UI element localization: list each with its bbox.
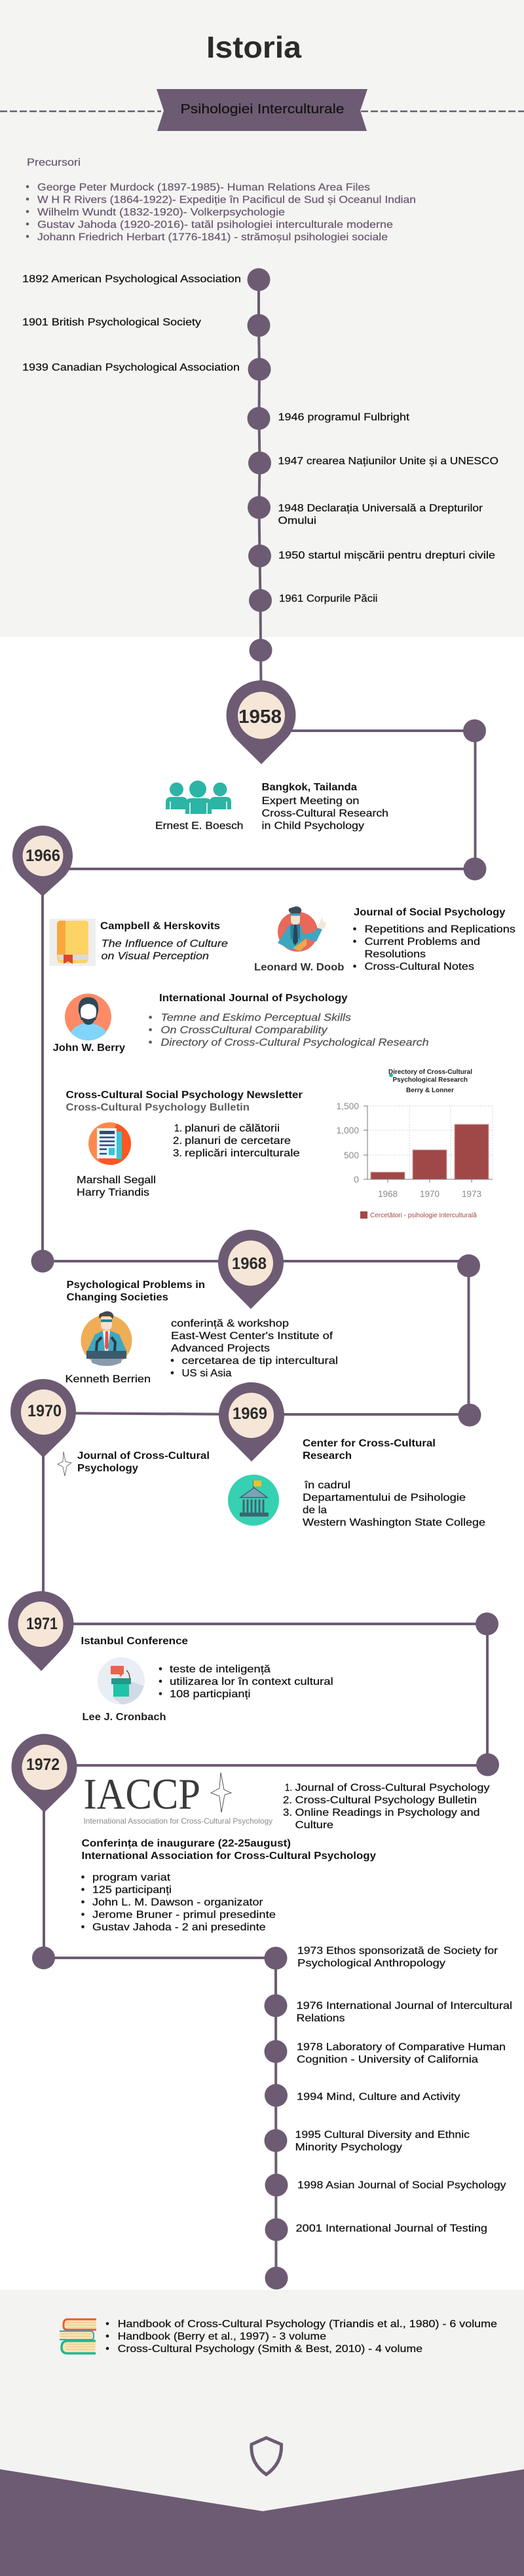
timeline: later events: Psychological Anthropology — [297, 1958, 445, 1969]
text: Istanbul topics: teste de inteligență — [170, 1664, 271, 1675]
pin: 1972 — [12, 1734, 77, 1812]
text: Campbell and Herskovits: on Visual Perception — [101, 951, 209, 962]
icon: book — [50, 919, 96, 966]
text: conference and workshop — [171, 1318, 338, 1379]
timeline: later events: 1998 Asian Journal of Social Psychology — [297, 2180, 506, 2191]
timeline: early events: 1939 Canadian Psychological Association — [22, 362, 240, 373]
text: inaugural conference: International Association for Cross-Cultural Psychology — [81, 1850, 376, 1862]
bar chart: Cercetători - psihologie interculturală — [370, 1212, 477, 1219]
pin: 1958: 1958 — [238, 707, 282, 727]
text: Istanbul topics: 108 particpianți — [170, 1689, 251, 1700]
icon: Leonard Doob — [278, 906, 326, 952]
text: International Journal of Psychology: Directory of Cross-Cultural Psychological Research — [160, 1037, 429, 1048]
text: Journal of Social Psychology: Journal of Social Psychology — [354, 907, 506, 918]
text: newsletter contents: 1. — [174, 1123, 182, 1134]
text: newsletter and bulletin: Cross-Cultural Psychology Bulletin — [66, 1102, 250, 1113]
text: Psychological Problems — [67, 1279, 205, 1303]
icon: newsletter — [88, 1122, 131, 1165]
timeline: early events: 1947 crearea Națiunilor Unite și a UNESCO — [278, 456, 498, 467]
text: Istanbul topics — [159, 1664, 333, 1700]
text: newsletter contents — [173, 1123, 300, 1159]
text: inaugural conference: Conferința de inaugurare (22-25august) — [81, 1838, 291, 1849]
icon: stack of books — [60, 2319, 96, 2353]
panel: precursors: Wilhelm Wundt (1832-1920)- Volkerpsychologie — [37, 207, 285, 218]
timeline: early events — [22, 268, 498, 684]
text: department: Western Washington State College — [303, 1517, 485, 1528]
text: Bangkok meeting: Expert Meeting on — [262, 796, 359, 807]
timeline: later events: Relations — [296, 2013, 345, 2024]
text: Psychological Problems: Changing Societies — [67, 1292, 168, 1303]
text: Journal of Cross-Cultural Psychology: Journal of Cross-Cultural — [77, 1450, 210, 1462]
text: conference and workshop: East-West Center's Institute of — [171, 1331, 333, 1342]
pin: 1958 — [227, 680, 296, 764]
text: inaugural conference — [81, 1838, 376, 1862]
icon: group of people — [166, 781, 231, 814]
panel: precursors: W H R Rivers (1864-1922)- Expediție în Pacificul de Sud și Oceanul Indian — [37, 194, 416, 206]
timeline: later events: 1973 Ethos sponsorizată de Society for — [297, 1945, 498, 1957]
panel: precursors: George Peter Murdock (1897-1985)- Human Relations Area Files — [37, 182, 370, 193]
text: department: în cadrul — [304, 1480, 350, 1491]
bar chart: 500 — [344, 1150, 359, 1160]
text: newsletter contents: replicări interculturale — [185, 1148, 300, 1159]
pin: 1969 — [219, 1382, 284, 1462]
text: conference details: program variat — [92, 1872, 171, 1883]
text: conference details: Gustav Jahoda - 2 ani presedinte — [92, 1922, 266, 1933]
timeline: early events: 1946 programul Fulbright — [278, 412, 410, 423]
text: Campbell and Herskovits: The Influence of Culture — [101, 938, 228, 949]
pin: 1968 — [218, 1230, 284, 1309]
timeline: early events: 1948 Declarația Universală a Drepturilor — [278, 503, 483, 514]
pin: 1971 — [9, 1591, 73, 1671]
text: Journal of Social Psychology: Repetitions and Replications — [364, 924, 515, 935]
text: Segall and Triandis — [77, 1175, 156, 1198]
text: handbooks: Handbook of Cross-Cultural Psychology (Triandis et al., 1980) - 6 volume — [118, 2319, 497, 2330]
text: International Journal of Psychology: Temne and Eskimo Perceptual Skills — [160, 1012, 351, 1023]
text: handbooks: Handbook (Berry et al., 1997) - 3 volume — [118, 2331, 326, 2342]
bar chart: 1,500 — [337, 1101, 359, 1111]
timeline: later events: 1976 International Journal of Intercultural — [296, 2000, 512, 2012]
text: department: Departamentului de Psihologie — [303, 1492, 466, 1503]
text: Boesch: Ernest E. Boesch — [155, 820, 244, 832]
text: International Journal of Psychology: On CrossCultural Comparability — [160, 1025, 328, 1036]
text: Center for Cross-Cultural Research: Center for Cross-Cultural — [303, 1438, 436, 1449]
text: Segall and Triandis: Marshall Segall — [77, 1175, 156, 1186]
subtitle ribbon: Psihologiei Interculturale — [181, 102, 345, 117]
connector lines: main path — [31, 719, 499, 2289]
bar chart: 1973 — [462, 1188, 481, 1199]
text: International Journal of Psychology: International Journal of Psychology — [159, 993, 348, 1004]
text: Bangkok meeting — [262, 782, 388, 832]
text: IACCP publications: Journal of Cross-Cultural Psychology — [295, 1782, 490, 1794]
panel: precursors — [26, 157, 416, 243]
text: handbooks: Cross-Cultural Psychology (Smith & Best, 2010) - 4 volume — [118, 2344, 422, 2355]
pin: 1970 — [10, 1379, 76, 1458]
timeline: later events: 1994 Mind, Culture and Activity — [297, 2091, 460, 2103]
timeline: early events: 1901 British Psychological Society — [22, 317, 201, 328]
logo: IACCP: International Association for Cross-Cultural Psychology — [84, 1816, 272, 1826]
panel: precursors: Gustav Jahoda (1920-2016)- tatăl psihologiei interculturale moderne — [37, 219, 393, 230]
text: IACCP publications — [283, 1782, 490, 1831]
text: Center for Cross-Cultural Research: Research — [303, 1450, 352, 1462]
bar chart: Berry & Lonner — [406, 1086, 454, 1094]
text: newsletter contents: planuri de călătorii — [185, 1123, 280, 1134]
logo: IACCP: IACCP — [84, 1770, 200, 1818]
logo: IACCP — [79, 1768, 275, 1828]
bar chart: Directory of Cross-Cultural — [388, 1068, 472, 1076]
text: IACCP publications: 1. — [285, 1782, 292, 1794]
bar chart: 1970 — [420, 1188, 440, 1199]
bar chart: 0 — [354, 1174, 359, 1185]
text: Kenneth Berrien: Kenneth Berrien — [66, 1374, 151, 1385]
timeline: later events: Cognition - University of California — [297, 2054, 478, 2065]
timeline: later events: Minority Psychology — [295, 2142, 402, 2153]
pin: 1969: 1969 — [233, 1405, 267, 1423]
text: Journal of Cross-Cultural Psychology — [77, 1450, 210, 1474]
text: conference details: 125 participanți — [92, 1885, 172, 1896]
bar chart: 1968 — [378, 1188, 398, 1199]
text: Bangkok meeting: Cross-Cultural Research — [262, 808, 388, 819]
text: newsletter and bulletin — [66, 1090, 303, 1113]
pin: 1968: 1968 — [232, 1255, 267, 1273]
subtitle ribbon — [157, 89, 367, 131]
text: IACCP publications: 3. — [283, 1807, 292, 1818]
text: Segall and Triandis: Harry Triandis — [77, 1187, 149, 1198]
text: newsletter contents: 2. — [173, 1135, 182, 1147]
timeline: later events: 2001 International Journal of Testing — [296, 2223, 487, 2234]
text: International Journal of Psychology — [149, 993, 429, 1048]
icon: institution building — [228, 1475, 279, 1526]
pin: 1972: 1972 — [26, 1756, 60, 1774]
text: Journal of Social Psychology: Resolutions — [364, 949, 426, 960]
pin: 1966 — [12, 826, 73, 896]
footer chevron — [0, 2469, 524, 2576]
text: conference and workshop: US si Asia — [182, 1368, 232, 1379]
icon: Cronbach podium — [98, 1657, 145, 1704]
timeline: early events: 1950 startul mișcării pentru drepturi civile — [278, 550, 495, 561]
icon: John Berry — [65, 994, 111, 1040]
text: IACCP publications: Culture — [295, 1820, 333, 1831]
title: Istoria — [206, 30, 301, 64]
bar chart: Psychological Research — [393, 1076, 468, 1084]
text: department: de la — [303, 1505, 327, 1516]
timeline: later events: 1995 Cultural Diversity and Ethnic — [295, 2129, 470, 2141]
pin: 1970: 1970 — [28, 1402, 62, 1420]
bar chart: 1,000 — [337, 1125, 359, 1135]
text: Psychological Problems: Psychological Problems in — [67, 1279, 205, 1291]
timeline: later events: 1978 Laboratory of Comparative Human — [297, 2042, 506, 2053]
text: John Berry: John W. Berry — [53, 1042, 125, 1054]
icon: shield — [252, 2438, 282, 2475]
text: Istanbul topics: utilizarea lor în context cultural — [170, 1676, 333, 1687]
text: IACCP publications: Online Readings in Psychology and — [295, 1807, 480, 1818]
text: Leonard Doob: Leonard W. Doob — [254, 962, 345, 973]
text: Campbell and Herskovits: Campbell & Herskovits — [100, 921, 220, 932]
text: conference details — [81, 1872, 276, 1933]
text: handbooks — [106, 2319, 497, 2355]
timeline: early events: 1961 Corpurile Păcii — [279, 593, 377, 604]
timeline: later events — [295, 1945, 512, 2234]
text: conference and workshop: conferință & workshop — [171, 1318, 289, 1329]
text: Bangkok meeting: Bangkok, Tailanda — [262, 782, 357, 793]
text: Bangkok meeting: in Child Psychology — [262, 820, 364, 832]
text: newsletter and bulletin: Cross-Cultural Social Psychology Newsletter — [66, 1090, 303, 1101]
bar chart — [337, 1068, 493, 1219]
text: Journal of Social Psychology: Cross-Cultural Notes — [364, 961, 474, 972]
timeline: early events: Omului — [278, 515, 316, 526]
text: Journal of Social Psychology — [353, 907, 515, 972]
text: department — [303, 1480, 485, 1528]
text: Lee Cronbach: Lee J. Cronbach — [83, 1712, 166, 1723]
text: newsletter contents: 3. — [173, 1148, 182, 1159]
text: conference and workshop: cercetarea de tip intercultural — [182, 1355, 338, 1367]
pin: 1971: 1971 — [26, 1615, 58, 1633]
pin: 1966: 1966 — [26, 847, 60, 865]
text: conference and workshop: Advanced Projects — [171, 1343, 270, 1354]
text: Center for Cross-Cultural Research — [303, 1438, 436, 1462]
text: Campbell and Herskovits — [100, 921, 228, 962]
text: Journal of Cross-Cultural Psychology: Psychology — [77, 1463, 138, 1474]
panel: precursors: Johann Friedrich Herbart (1776-1841) - strămoșul psihologiei sociale — [37, 232, 388, 243]
text: Istanbul Conference: Istanbul Conference — [81, 1636, 188, 1647]
text: conference details: Jerome Bruner - primul presedinte — [92, 1909, 276, 1921]
icon: star logo — [58, 1452, 71, 1476]
text: Journal of Social Psychology: Current Problems and — [364, 936, 480, 948]
text: newsletter contents: planuri de cercetare — [185, 1135, 291, 1147]
text: conference details: John L. M. Dawson - organizator — [92, 1897, 263, 1908]
text: IACCP publications: Cross-Cultural Psychology Bulletin — [295, 1795, 477, 1806]
timeline: early events: 1892 American Psychological Association — [22, 274, 241, 285]
icon: Kenneth Berrien — [81, 1311, 132, 1366]
text: IACCP publications: 2. — [283, 1795, 292, 1806]
panel: precursors: Precursori — [27, 157, 81, 168]
